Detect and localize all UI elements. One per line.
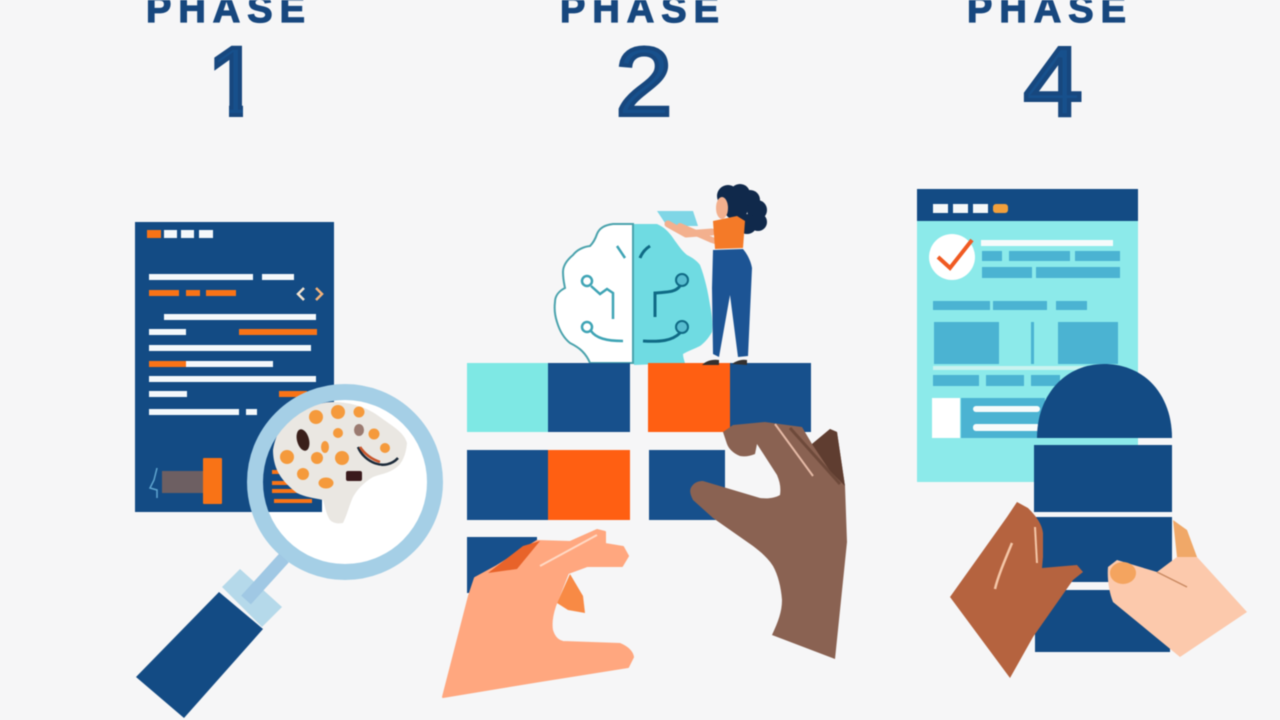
- magnified brain: [273, 402, 407, 523]
- light hand: [1108, 520, 1247, 657]
- heading: phase 2: 2: [616, 28, 672, 136]
- phone blocks: [1034, 364, 1172, 652]
- heading: phase 4: 4: [1024, 28, 1082, 136]
- icon: check mark: [929, 234, 975, 280]
- block grid: [467, 363, 811, 593]
- icon: hammer block: [150, 458, 222, 504]
- report document: [917, 189, 1138, 482]
- panel: phase 4 validation illustration: [917, 189, 1247, 678]
- magnifier handle: [136, 558, 284, 718]
- brown hand: [690, 422, 847, 659]
- orange hand: [443, 530, 633, 697]
- lens interior backing: [255, 392, 435, 572]
- lens interior right edge: [322, 497, 336, 513]
- magnifier ring: [255, 392, 435, 572]
- brain: [555, 224, 712, 365]
- heading: phase 1: 1: [207, 27, 261, 136]
- brown hand: [950, 502, 1083, 678]
- icon: code brackets: [298, 288, 322, 300]
- panel: phase 2 building blocks illustration: [443, 184, 847, 697]
- panel: phase 1 code review illustration: [135, 222, 435, 718]
- heading: phase 2: [560, 0, 726, 136]
- figure: woman with tablet: [657, 184, 767, 365]
- code document: [135, 222, 334, 512]
- heading: phase 1: [146, 0, 312, 136]
- heading: phase 4: [967, 0, 1133, 136]
